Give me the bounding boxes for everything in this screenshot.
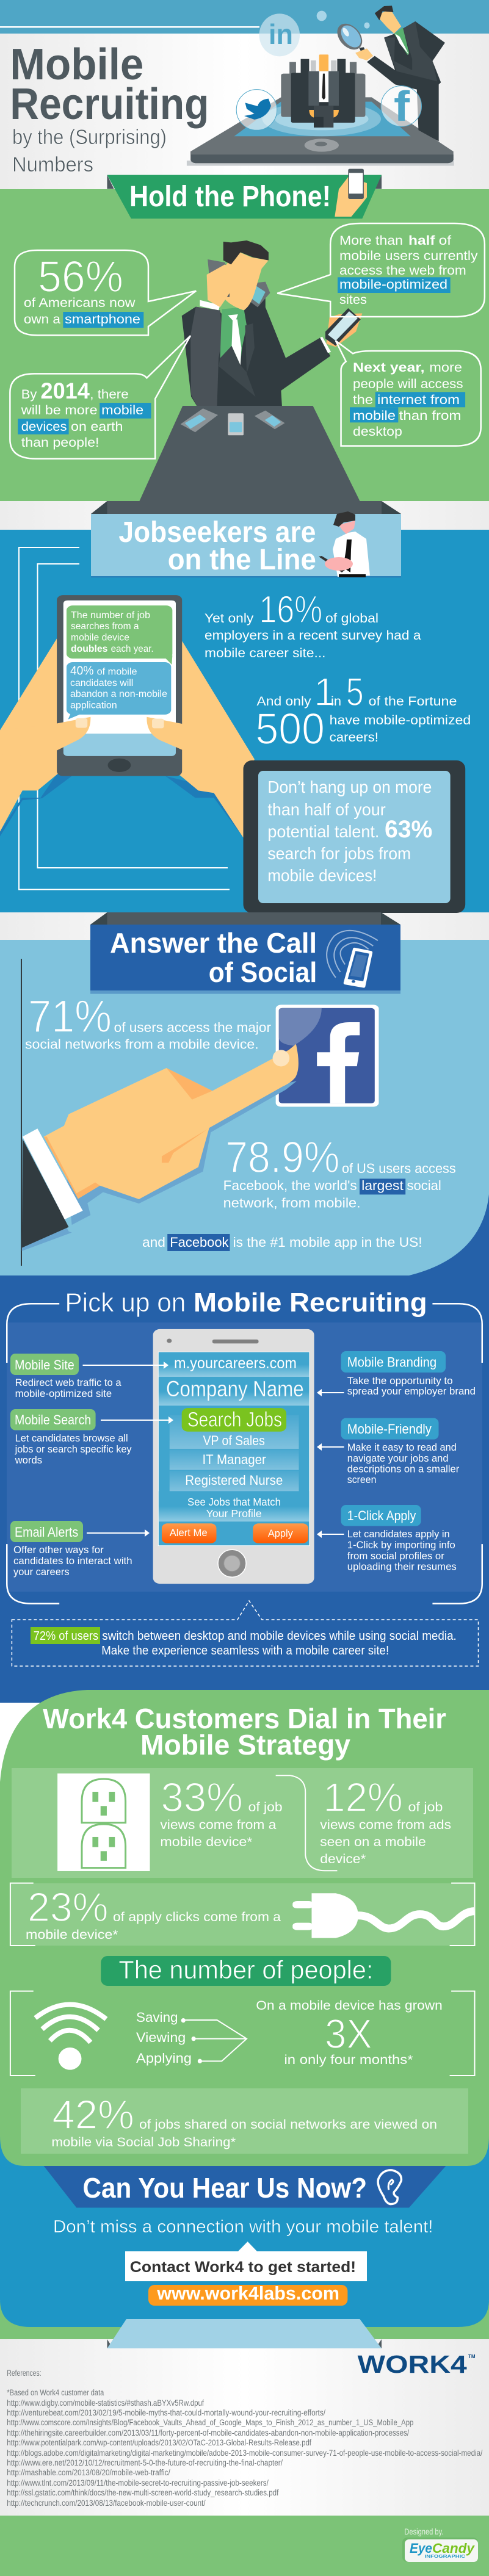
feature: email alerts: Email Alerts [15, 1524, 78, 1540]
stat: 78.9 percent: 78.9% [225, 1133, 339, 1182]
speech bubble: half of mobile users: mobile-optimized [339, 278, 447, 292]
heading banner: Answer the Call of Social: of Social [209, 956, 317, 988]
stat: 71 percent [25, 990, 272, 1052]
feature: 1-click apply: 1-Click Apply [347, 1508, 416, 1523]
panel: apply clicks stat with plug: 23% [27, 1885, 109, 1930]
callout: 72 percent of users: 72% of users [34, 1629, 98, 1643]
stat: 78.9 percent: network, from mobile. [223, 1196, 361, 1211]
panel: 42 percent of jobs shared: mobile via Social Job Sharing* [51, 2135, 236, 2149]
speech bubble: by 2014: By [21, 388, 37, 402]
stat: 33 percent: 33% [161, 1775, 243, 1820]
icon: linkedin: in [269, 18, 293, 50]
icon: wifi signal and connector lines [10, 1991, 474, 2076]
speech bubble: by 2014: devices [21, 420, 67, 434]
logo: EyeCandy Infographic: INFOGRAPHIC [425, 2553, 466, 2559]
decorative bottom ribbon [107, 2319, 382, 2348]
illustration: finger pressing Facebook icon [22, 1005, 379, 1251]
stat: 78.9 percent: of US users access [342, 1161, 456, 1176]
references: http://ssl.gstatic.com/think/docs/the-new-multi-screen-world-study_research-studies.pdf [7, 2488, 279, 2497]
heading: The number of people: The number of people: [118, 1955, 373, 1984]
illustration: hands holding a phone with chat bubbles [0, 595, 255, 838]
stat: 12 percent: seen on a mobile [320, 1835, 426, 1849]
text: phone chat bubbles: 40% [70, 665, 94, 678]
text: phone chat bubbles: mobile device [71, 632, 129, 643]
phone mockup [153, 1329, 314, 1584]
panel: apply clicks stat with plug [10, 1883, 474, 1946]
stat: 12 percent: 12% [323, 1775, 403, 1820]
heading banner: Jobseekers are on the Line [91, 501, 401, 577]
stat: 33 percent [160, 1775, 283, 1849]
stat: 16 percent of employers: mobile career site... [205, 646, 326, 660]
speech bubble: 56 percent of Americans: of Americans now [24, 296, 136, 310]
references: http://techcrunch.com/2013/08/13/facebook-mobile-user-count/ [7, 2498, 206, 2508]
text: don't miss a connection: Don’t miss a connection with your mobile talent! [53, 2217, 433, 2237]
phone mockup: Search Jobs [187, 1409, 282, 1432]
stat: 16 percent of employers [205, 588, 421, 660]
speech bubble: half of mobile users [277, 223, 485, 317]
panel: 42 percent of jobs shared: 42% [52, 2092, 134, 2138]
heading: Work4 Customers Dial in Their Mobile Strategy: Mobile Strategy [140, 1729, 350, 1761]
stat: 1 in 5 of the Fortune 500: of the Fortune [369, 694, 457, 709]
panel: 3X growth [10, 1991, 474, 2076]
feature: email alerts: your careers [13, 1566, 70, 1578]
speech bubble: next year: desktop [353, 425, 402, 439]
heading: Mobile Recruiting [194, 1288, 427, 1318]
feature: mobile branding: Take the opportunity to [347, 1375, 453, 1387]
heading banner: Can You Hear Us Now: Can You Hear Us Now? [83, 2172, 367, 2204]
phone mockup: Apply [268, 1528, 293, 1539]
feature: mobile-friendly: descriptions on a smaller [347, 1463, 460, 1474]
heading [65, 1288, 427, 1318]
stat: 12 percent: device* [320, 1852, 366, 1866]
speech bubble: half of mobile users: of [439, 234, 451, 248]
references: http://thehiringsite.careerbuilder.com/2013/03/11/forty-percent-of-mobile-candidates-abandon-non-mobile-application-processes/ [7, 2428, 409, 2437]
illustration: businessman on phone at podium [91, 240, 400, 514]
references: References: [7, 2369, 42, 2378]
stat: 16 percent of employers: employers in a recent survey had a [205, 628, 421, 643]
feature: mobile search: jobs or search specific key [15, 1443, 132, 1455]
list: saving viewing applying: Applying [136, 2051, 192, 2066]
feature: mobile site: Mobile Site [15, 1357, 74, 1373]
stat: 3X: in only four months* [284, 2053, 413, 2067]
stat: 16 percent of employers: 16% [259, 588, 322, 631]
stat: 3X [256, 1999, 443, 2067]
stat: 3X: 3X [325, 2011, 372, 2057]
icon: ear [378, 2170, 401, 2204]
icon: facebook: f [394, 82, 410, 130]
feature: email alerts: Offer other ways for [13, 1544, 104, 1556]
speech bubble: half of mobile users: half [408, 234, 436, 248]
feature: mobile-friendly: Mobile-Friendly [347, 1421, 432, 1437]
list: saving viewing applying: Saving [136, 2010, 178, 2025]
feature: mobile search: Mobile Search [15, 1412, 91, 1427]
icon: ringing phone [327, 931, 378, 986]
text: Facebook number one app [142, 1234, 422, 1251]
references: http://www.ere.net/2012/10/12/recruitment-5-0-the-future-of-recruiting-the-final-chapter/ [7, 2458, 283, 2467]
references: http://www.potentialpark.com/wp-content/uploads/2013/02/OTaC-2013-Global-Results-Release.pdf [7, 2438, 311, 2447]
text: phone chat bubbles: searches from a [71, 621, 139, 632]
stat: 3X: On a mobile device has grown [256, 1999, 443, 2013]
title: by the (Surprising) [12, 126, 167, 149]
title: Numbers [12, 153, 93, 176]
logo: EyeCandy Infographic: Candy [432, 2541, 476, 2556]
feature: mobile search [10, 1409, 173, 1466]
speech bubble: by 2014: mobile [101, 403, 143, 417]
feature: mobile site: Redirect web traffic to a [15, 1377, 121, 1388]
decorative outline frames around phone [19, 547, 230, 890]
speech bubble: next year: mobile [353, 409, 396, 423]
feature: 1-click apply: from social profiles or [347, 1550, 444, 1562]
heading: Work4 Customers Dial in Their Mobile Strategy: Work4 Customers Dial in Their [43, 1703, 446, 1734]
stat: 71 percent: 71% [28, 990, 112, 1042]
feature: mobile-friendly: Make it easy to read and [347, 1441, 457, 1453]
phone mockup: Registered Nurse [185, 1473, 283, 1488]
stat: 78.9 percent [223, 1133, 456, 1211]
stat: 1 in 5 of the Fortune 500: 500 [255, 705, 325, 754]
feature: mobile branding: spread your employer brand [347, 1385, 476, 1397]
feature: mobile-friendly: navigate your jobs and [347, 1452, 448, 1464]
speech bubble: by 2014 [10, 336, 190, 459]
heading banner: Answer the Call of Social: Answer the Call [110, 927, 317, 959]
text: phone chat bubbles: abandon a non-mobile [70, 689, 167, 699]
text: phone chat bubbles [70, 610, 167, 711]
callout: 72 percent of users [12, 1601, 478, 1666]
stat: 16 percent of employers: Yet only [205, 611, 254, 626]
speech bubble: by 2014: than people! [21, 436, 99, 450]
heading banner: Hold the Phone [107, 169, 382, 218]
speech bubble: 56 percent of Americans [15, 250, 196, 335]
speech bubble: next year: people will access [353, 377, 463, 391]
decorative vertical line [21, 959, 22, 1266]
stat: 1 in 5 of the Fortune 500: careers! [330, 730, 379, 745]
phone mockup: Company Name [166, 1376, 304, 1401]
speech bubble: next year: Next year, [353, 361, 425, 375]
speech bubble: half of mobile users: mobile users currently [339, 249, 478, 263]
heading: Pick up on [65, 1288, 186, 1318]
speech bubble: by 2014: 2014 [40, 378, 90, 403]
callout: 72 percent of users: switch between desktop and mobile devices while using social media. [102, 1629, 457, 1643]
panel: apply clicks stat with plug: mobile device* [26, 1928, 118, 1942]
icon: jobseeker with tablet [319, 511, 370, 577]
text: Facebook number one app: is the #1 mobile app in the US! [233, 1235, 422, 1250]
panel: apply clicks stat with plug: of apply clicks come from a [113, 1910, 281, 1924]
heading banner: Jobseekers are on the Line: on the Line [168, 544, 316, 576]
feature: email alerts [10, 1521, 150, 1578]
icon: wall outlets [57, 1773, 337, 1871]
feature: 1-click apply: uploading their resumes [347, 1561, 457, 1572]
feature: mobile site: mobile-optimized site [15, 1388, 112, 1399]
heading banner: Jobseekers are on the Line: Jobseekers are [118, 516, 316, 549]
feature: mobile-friendly [317, 1418, 460, 1485]
logo: EyeCandy Infographic: Eye [410, 2541, 432, 2556]
stat: 1 in 5 of the Fortune 500: And only [256, 694, 311, 709]
stat: 33 percent: of job [248, 1800, 283, 1814]
stat: 71 percent: of users access the major [114, 1020, 272, 1035]
heading banner: Can You Hear Us Now [44, 2166, 446, 2208]
speech bubble: next year: more [429, 361, 462, 375]
feature: mobile site [10, 1354, 168, 1399]
stat: 78.9 percent: largest [361, 1178, 404, 1193]
speech bubble: 56 percent of Americans: own a [24, 312, 60, 327]
feature: mobile search: Let candidates browse all [15, 1432, 128, 1444]
callout: contact Work4: Contact Work4 to get started! [130, 2259, 356, 2276]
stat: 71 percent: social networks from a mobile device. [25, 1037, 259, 1052]
references: http://mashable.com/2013/08/20/mobile-web-traffic/ [7, 2468, 170, 2477]
callout: laptop with 63 percent stat: 63% [385, 816, 432, 843]
feature: mobile-friendly: screen [347, 1474, 376, 1485]
callout: laptop with 63 percent stat [243, 760, 465, 913]
speech bubble: next year: the [353, 393, 373, 407]
stat: 1 in 5 of the Fortune 500: 1 [314, 669, 336, 714]
stat: 78.9 percent: social [407, 1178, 441, 1193]
stat: 33 percent: views come from a [160, 1818, 277, 1832]
credit: designed by: Designed by. [404, 2527, 443, 2536]
callout: laptop with 63 percent stat: search for jobs from [267, 844, 411, 863]
logo: EyeCandy Infographic [402, 2538, 478, 2562]
stat: 1 in 5 of the Fortune 500 [255, 669, 471, 754]
stat: 12 percent: views come from ads [320, 1818, 451, 1832]
text: Facebook number one app: Facebook [170, 1235, 229, 1250]
feature: mobile branding [317, 1351, 476, 1397]
callout: laptop with 63 percent stat: mobile devices! [267, 866, 377, 885]
references: *Based on Work4 customer data [7, 2388, 104, 2397]
speech bubble: by 2014: on earth [71, 420, 123, 434]
feature: 1-click apply: Let candidates apply in [347, 1528, 450, 1540]
frame corners [7, 1304, 482, 1604]
speech bubble: half of mobile users: More than [339, 234, 403, 248]
text: phone chat bubbles: of mobile [97, 667, 137, 677]
feature: email alerts: candidates to interact with [13, 1555, 132, 1567]
speech bubble: next year [336, 341, 481, 446]
phone mockup: See Jobs that Match [187, 1496, 281, 1508]
logo: WORK4: WORK4 [358, 2350, 467, 2378]
phone mockup: m.yourcareers.com [174, 1355, 297, 1372]
callout: 72 percent of users: Make the experience seamless with a mobile career site! [101, 1644, 389, 1658]
feature: 1-click apply [317, 1505, 457, 1572]
references: http://www.digby.com/mobile-statistics/#sthash.aBYXv5Rw.dpuf [7, 2398, 204, 2408]
speech bubble: next year: internet from [377, 393, 460, 407]
stat: 78.9 percent: Facebook, the world's [223, 1178, 357, 1193]
text: Facebook number one app: and [142, 1235, 165, 1250]
stat: 1 in 5 of the Fortune 500: have mobile-optimized [330, 713, 471, 727]
text: phone chat bubbles: The number of job [71, 610, 150, 621]
button: website: www.work4labs.com [156, 2282, 339, 2304]
illustration: tablet with suited figure and magnifying manager [187, 5, 454, 166]
phone mockup: VP of Sales [203, 1433, 265, 1448]
text: phone chat bubbles: each year. [111, 644, 154, 654]
heading banner: Answer the Call of Social [90, 912, 400, 994]
text: phone chat bubbles: candidates will [70, 678, 133, 688]
speech bubble: next year: than from [399, 409, 462, 423]
text: phone chat bubbles: application [70, 701, 117, 711]
heading banner: Hold the Phone: Hold the Phone! [129, 181, 331, 213]
stat: 1 in 5 of the Fortune 500: 5 [346, 669, 364, 714]
callout: contact Work4 [125, 2242, 367, 2281]
callout: laptop with 63 percent stat: potential talent. [267, 822, 379, 841]
stat: 12 percent [320, 1775, 451, 1866]
title: Recruiting [10, 80, 209, 129]
stat: 12 percent: of job [408, 1800, 443, 1814]
references: http://www.tlnt.com/2013/09/11/the-mobile-secret-to-recruiting-passive-job-seekers/ [7, 2478, 269, 2488]
references: http://www.comscore.com/Insights/Blog/Facebook_Vaults_Ahead_of_Google_Maps_to_Finish_2012_as_number_1_US_Mobile_App [7, 2418, 413, 2427]
phone mockup: Alert Me [170, 1527, 208, 1539]
speech bubble: 56 percent of Americans: 56% [38, 253, 123, 301]
speech bubble: half of mobile users: sites [339, 293, 367, 307]
phone mockup: IT Manager [203, 1452, 266, 1467]
feature: 1-click apply: 1-Click by importing info [347, 1539, 455, 1551]
speech bubble: half of mobile users: access the web from [339, 264, 466, 278]
phone mockup: Your Profile [206, 1507, 262, 1520]
stat: 33 percent: mobile device* [160, 1835, 252, 1849]
panel: pick up on mobile recruiting [7, 1288, 482, 1604]
list: saving viewing applying [136, 2010, 192, 2066]
callout: laptop with 63 percent stat: Don’t hang up on more [267, 777, 432, 796]
title: Mobile [10, 40, 143, 89]
references [7, 2369, 483, 2508]
stat: 16 percent of employers: of global [325, 611, 379, 626]
feature: mobile branding: Mobile Branding [347, 1355, 436, 1369]
text: phone chat bubbles: doubles [71, 644, 107, 654]
heading: Work4 Customers Dial in Their Mobile Strategy [43, 1703, 446, 1761]
speech bubble: 56 percent of Americans: smartphone [65, 312, 140, 327]
list: saving viewing applying: Viewing [136, 2030, 186, 2045]
references: http://venturebeat.com/2013/02/19/5-mobile-myths-that-could-mortally-wound-your-recruiting-efforts/ [7, 2408, 325, 2417]
panel: 42 percent of jobs shared [21, 2088, 468, 2154]
stat: 1 in 5 of the Fortune 500: in [331, 694, 341, 709]
panel: job views stats [12, 1768, 473, 1878]
speech bubble: by 2014: will be more [21, 403, 98, 417]
title [10, 40, 209, 176]
feature: mobile search: words [15, 1454, 42, 1466]
callout: laptop with 63 percent stat: than half of your [267, 800, 386, 819]
decorative header line [0, 26, 259, 28]
logo: WORK4: TM [468, 2354, 476, 2359]
panel: 42 percent of jobs shared: of jobs shared on social networks are viewed on [139, 2118, 437, 2132]
speech bubble: by 2014: , there [90, 388, 129, 402]
